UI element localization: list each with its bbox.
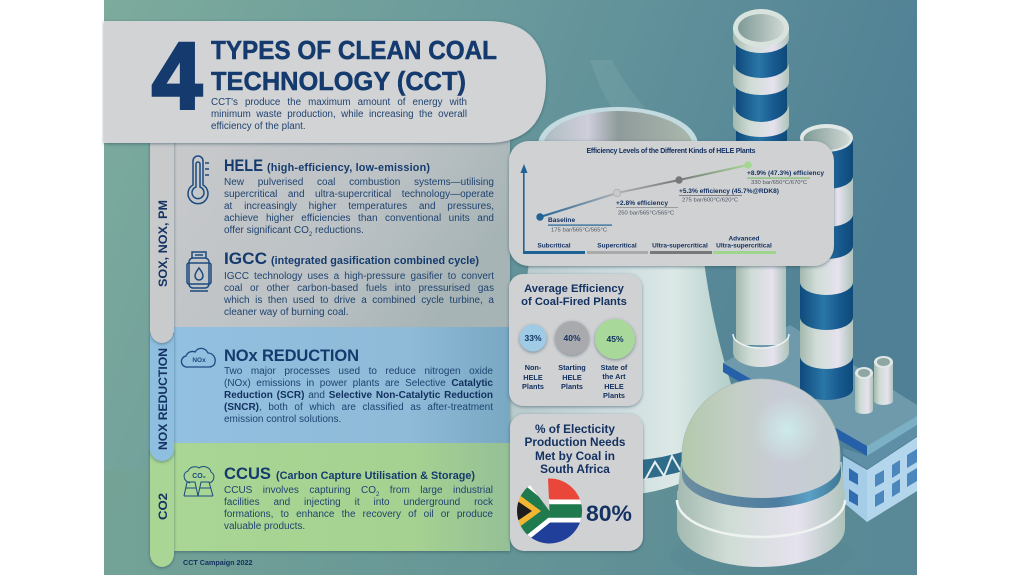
side tab: CO2	[150, 450, 174, 567]
bubbles	[520, 319, 635, 359]
text: HELE: New pulverised coal combustion systems—utilising	[224, 177, 494, 188]
bubbles: 33%	[524, 333, 542, 343]
panel heading: South Africa	[540, 462, 610, 476]
bubble captions: Non-	[525, 363, 542, 372]
chimney 1	[733, 9, 789, 367]
text: CCUS: facilities and injecting it into underground rock	[224, 497, 493, 508]
bubbles: 40%	[563, 333, 581, 343]
icon: gas cylinder	[187, 252, 211, 291]
arrow axis	[520, 164, 528, 253]
panel heading	[521, 283, 627, 308]
data labels: 175 bar/565°C/565°C	[551, 228, 608, 234]
icon: CO2 factory cloud: CO₂	[192, 473, 206, 480]
text: IGCC: IGCC technology uses a high-pressure gasifier to convert	[224, 271, 494, 282]
bubbles: 45%	[606, 334, 624, 344]
icon: NOx cloud	[181, 348, 215, 367]
title description: efficiency of the plant.	[211, 121, 306, 132]
bubble captions: the Art	[602, 372, 626, 381]
category labels: Ultra-supercritical	[652, 242, 708, 250]
bubble captions: State of	[601, 363, 628, 372]
bubble captions: HELE	[604, 382, 624, 391]
heading: NOx reduction: NOx REDUCTION	[224, 347, 359, 365]
data labels: Baseline	[548, 217, 575, 224]
bubble captions: HELE	[523, 373, 543, 382]
text: CCUS: formations, to enhance the recovery of oil or produce	[224, 509, 493, 520]
reactor dome	[676, 378, 846, 567]
bubble captions: Plants	[522, 382, 544, 391]
text: NOx reduction: Reduction (SCR) and Selective Non-Catalytic Reduction	[224, 390, 493, 401]
category labels: Ultra-supercritical	[716, 242, 772, 250]
panel: efficiency chart	[509, 141, 834, 266]
heading: CCUS	[224, 465, 475, 483]
bubble captions: Starting	[558, 363, 586, 372]
side tab: CO2: CO2	[158, 493, 170, 520]
category labels	[537, 236, 772, 250]
heading: HELE	[224, 157, 430, 175]
heading: HELE: HELE	[224, 157, 263, 175]
title description	[211, 97, 467, 132]
title banner	[104, 21, 546, 143]
text: CCUS: CCUS involves capturing CO2 from large industrial	[224, 485, 493, 498]
panel heading: of Coal-Fired Plants	[521, 296, 627, 308]
category labels: Supercritical	[597, 242, 637, 250]
data labels: +2.8% efficiency	[616, 200, 668, 207]
data labels: +8.9% (47.3%) efficiency	[747, 170, 824, 177]
bubble captions: Plants	[561, 382, 583, 391]
bubble captions: HELE	[562, 373, 582, 382]
text: CCUS	[224, 485, 493, 532]
text: HELE: offer significant CO2 reductions.	[224, 225, 364, 238]
data labels	[548, 170, 824, 234]
title	[211, 37, 497, 96]
panel heading: Met by Coal in	[535, 449, 615, 463]
text: HELE: achieve higher efficiencies than conventional units and	[224, 213, 494, 224]
text: HELE: supercritical and ultra-supercritical technology—operate	[224, 189, 494, 200]
panel heading	[525, 422, 626, 476]
bubble captions	[522, 363, 628, 400]
platform	[723, 325, 917, 522]
background	[104, 0, 917, 575]
heading: CCUS: (Carbon Capture Utilisation & Storage)	[276, 470, 475, 482]
category bars	[523, 251, 776, 254]
heading: IGCC	[224, 250, 479, 268]
efficiency line	[536, 161, 752, 221]
big percentage: 80%	[586, 501, 632, 526]
heading: IGCC: IGCC	[224, 250, 267, 268]
text: IGCC: coal or other carbon-based fuels into pressurised gas	[224, 283, 494, 294]
text: IGCC: which is then used to drive a combined cycle turbine, a	[224, 295, 494, 306]
text: HELE	[224, 177, 494, 238]
text: HELE: at increasingly higher temperatures and pressures,	[224, 201, 494, 212]
heading: IGCC: (integrated gasification combined cycle)	[271, 255, 479, 267]
panel heading: % of Electicity	[535, 422, 615, 436]
side tab: NOx reduction: NOX REDUCTION	[158, 348, 170, 450]
data labels: 275 bar/600°C/620°C	[682, 198, 739, 204]
chimney 2	[800, 124, 853, 400]
cooling tower	[510, 60, 732, 494]
data labels: 330 bar/650°C/670°C	[751, 180, 808, 186]
chart title: Efficiency Levels of the Different Kinds of HELE Plants	[586, 148, 756, 155]
category labels: Subcritical	[537, 242, 571, 250]
text: NOx reduction: (NOx) emissions in power plants are Selective Catalytic	[224, 378, 493, 389]
title description: minimum waste production, while increasing the overall	[211, 109, 467, 120]
panel: average efficiency	[509, 274, 642, 406]
text: NOx reduction	[224, 366, 493, 425]
data labels: +5.3% efficiency (45.7%@RDK8)	[679, 188, 779, 195]
title description: CCT's produce the maximum amount of energy with	[211, 97, 467, 108]
building windows	[849, 449, 917, 507]
icon: CO2 factory cloud	[184, 467, 214, 496]
bubble captions: Plants	[603, 391, 625, 400]
panel heading: Average Efficiency	[524, 283, 625, 295]
text: IGCC: cleaner way of burning coal.	[224, 307, 349, 318]
heading: HELE: (high-efficiency, low-emission)	[267, 162, 430, 174]
icon: thermometer	[188, 156, 209, 204]
heading: CCUS: CCUS	[224, 465, 271, 483]
big numeral 4: 4	[152, 23, 202, 128]
flag pie chart	[517, 478, 582, 544]
side tab: SOx NOx PM	[150, 140, 174, 343]
side tab: NOx reduction	[150, 335, 174, 461]
illustration: power plant	[495, 9, 917, 575]
text: IGCC	[224, 271, 494, 318]
data labels: 250 bar/565°C/565°C	[618, 210, 675, 216]
text: NOx reduction: (SNCR), both of which are classified as after-treatment	[224, 402, 493, 413]
footer credit: CCT Campaign 2022	[183, 558, 253, 567]
text: NOx reduction: Two major processes used to reduce nitrogen oxide	[224, 366, 493, 377]
panel heading: Production Needs	[525, 435, 626, 449]
category labels: Advanced	[728, 236, 760, 242]
small cylinders	[855, 356, 893, 414]
title: TECHNOLOGY (CCT)	[211, 68, 466, 96]
title: TYPES OF CLEAN COAL	[211, 37, 497, 65]
text: NOx reduction: emission control solutions.	[224, 414, 341, 425]
icon: NOx cloud: NOx	[192, 357, 206, 364]
left panel backgrounds	[174, 140, 510, 551]
panel: South Africa share	[505, 414, 643, 551]
text: CCUS: valuable products.	[224, 521, 305, 532]
side tab: SOx NOx PM: SOX, NOX, PM	[158, 200, 170, 287]
